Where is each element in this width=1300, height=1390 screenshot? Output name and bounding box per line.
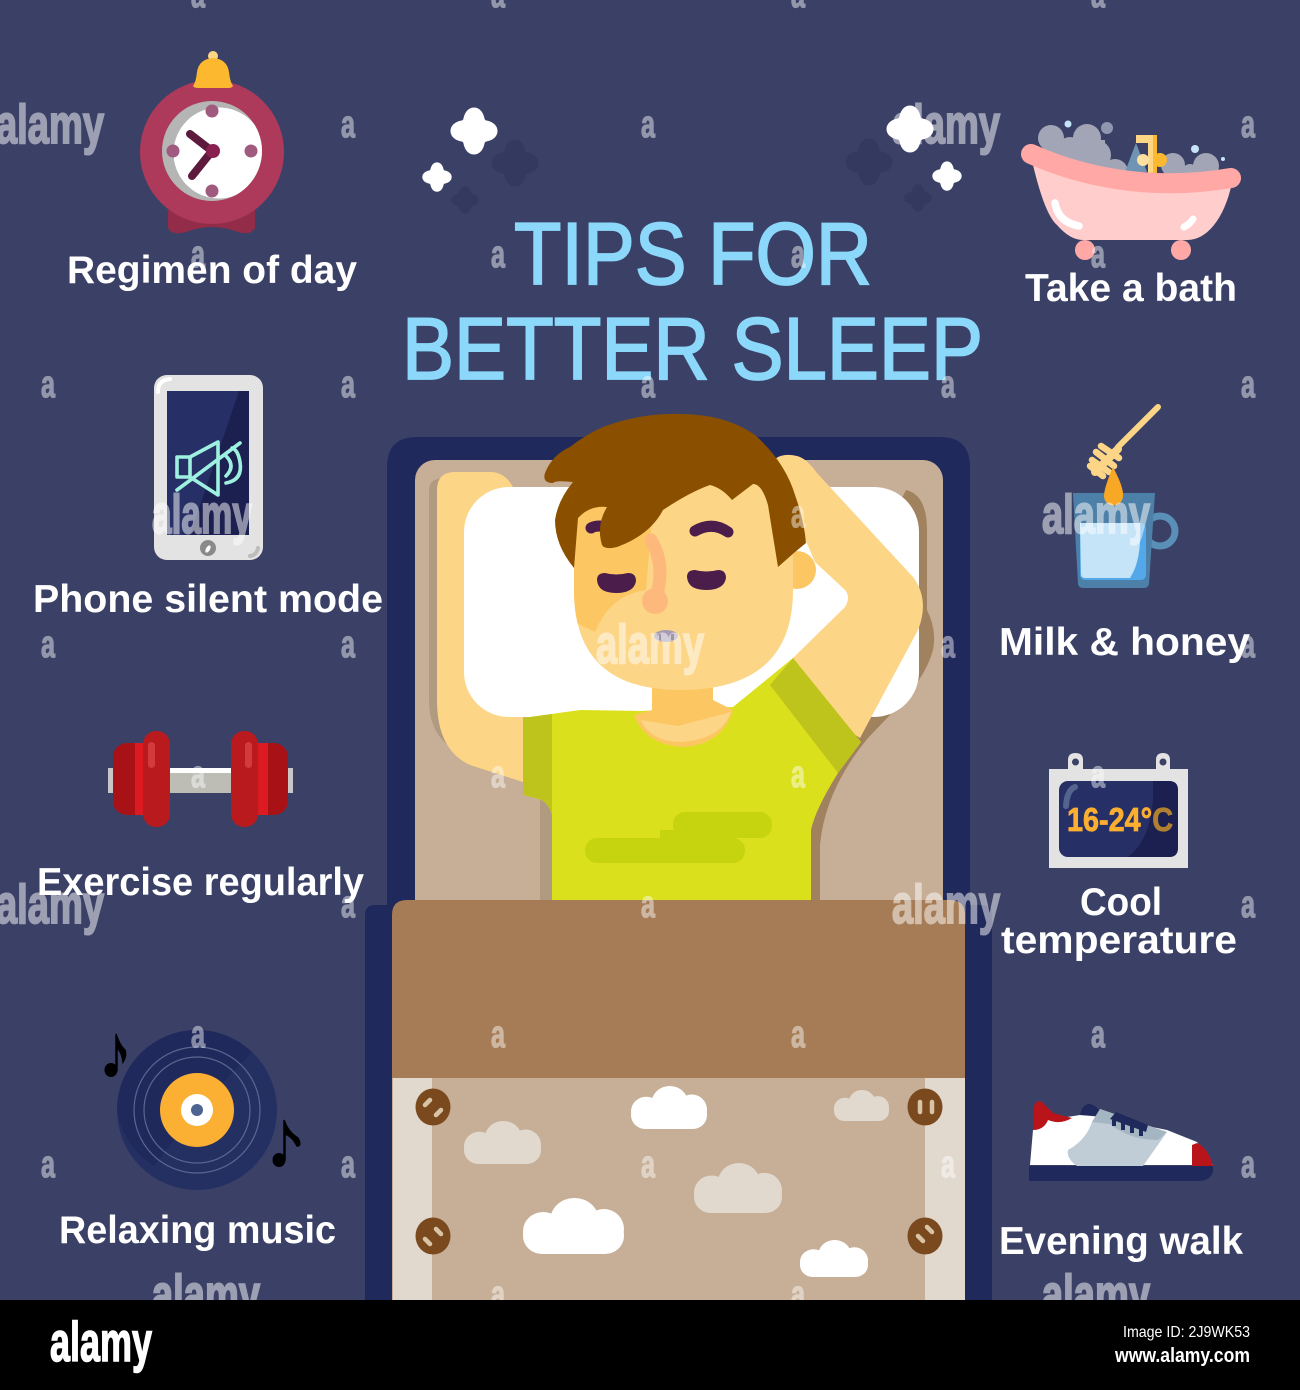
watermarks: a <box>791 234 806 276</box>
watermarks: a <box>641 104 656 146</box>
head <box>570 480 793 690</box>
label: take a bath: Take a bath <box>1025 267 1237 310</box>
watermarks: a <box>1091 754 1106 796</box>
icon: bathtub <box>1031 120 1232 260</box>
watermarks: a <box>1241 364 1256 406</box>
sheet <box>392 1078 965 1300</box>
watermarks: a <box>491 234 506 276</box>
label: regimen of day: Regimen of day <box>67 249 357 292</box>
nose <box>642 540 668 614</box>
watermarks: a <box>1091 1014 1106 1056</box>
blanket <box>392 900 965 1078</box>
watermarks: a <box>641 1144 656 1186</box>
watermarks: a <box>941 1144 956 1186</box>
icon: phone <box>154 375 263 560</box>
watermarks: a <box>491 494 506 536</box>
icon: sneaker <box>1029 1101 1213 1181</box>
eyebrows <box>591 526 728 532</box>
bed frame <box>365 437 992 1300</box>
watermarks: alamy <box>892 93 1000 155</box>
watermarks: a <box>191 754 206 796</box>
neck <box>634 680 733 747</box>
label: phone silent mode: Phone silent mode <box>33 578 383 621</box>
watermarks: a <box>191 234 206 276</box>
label: cool temperature: temperature <box>1001 919 1237 962</box>
icon: thermometer display: 16-24°C <box>1067 801 1173 838</box>
watermarks: a <box>41 364 56 406</box>
footer bar: Image ID: 2J9WK53 <box>1123 1324 1250 1341</box>
watermarks: a <box>341 1144 356 1186</box>
watermarks: a <box>1091 234 1106 276</box>
shirt <box>523 658 861 900</box>
title: BETTER SLEEP <box>402 299 983 398</box>
title: TIPS FOR <box>514 204 872 303</box>
watermarks: a <box>641 884 656 926</box>
footer bar <box>0 1300 1300 1390</box>
watermarks: a <box>41 624 56 666</box>
footer bar: www.alamy.com <box>1114 1345 1250 1367</box>
watermarks: alamy <box>152 483 252 545</box>
watermarks: alamy <box>1042 1263 1150 1325</box>
mouth <box>654 630 678 642</box>
left arm <box>437 472 523 782</box>
watermarks: a <box>191 1014 206 1056</box>
shadows under the sleeper <box>429 478 555 900</box>
label: milk and honey: Milk & honey <box>999 621 1250 664</box>
title <box>402 204 983 398</box>
watermarks: alamy <box>152 1263 260 1325</box>
watermarks: a <box>641 364 656 406</box>
watermarks: alamy <box>892 873 1000 935</box>
icon: thermometer display <box>1049 753 1188 868</box>
left music note <box>104 1034 126 1077</box>
clouds <box>464 1086 889 1277</box>
watermarks: a <box>791 754 806 796</box>
label: evening walk: Evening walk <box>999 1220 1243 1263</box>
decorative stars right <box>846 106 962 212</box>
decorative stars left <box>422 108 538 214</box>
mattress <box>415 460 943 920</box>
watermarks: a <box>1241 884 1256 926</box>
watermarks: a <box>791 494 806 536</box>
watermarks: a <box>341 104 356 146</box>
icon: vinyl record with music notes <box>104 1030 300 1190</box>
watermarks: a <box>1241 1144 1256 1186</box>
watermarks: a <box>1241 104 1256 146</box>
watermarks: a <box>491 1274 506 1316</box>
watermarks: alamy <box>596 613 704 675</box>
bed <box>365 414 992 1300</box>
watermarks: a <box>41 1144 56 1186</box>
closed eyes <box>597 570 726 593</box>
blanket buttons <box>416 1088 942 1254</box>
watermarks: a <box>491 754 506 796</box>
right arm behind head <box>772 455 923 738</box>
watermarks: a <box>341 884 356 926</box>
watermarks: a <box>791 1274 806 1316</box>
watermarks: a <box>341 364 356 406</box>
watermarks: alamy <box>0 93 104 155</box>
watermarks: a <box>1241 624 1256 666</box>
label: relaxing music: Relaxing music <box>59 1209 336 1252</box>
watermarks: a <box>791 1014 806 1056</box>
hair <box>544 414 806 568</box>
watermarks: a <box>941 364 956 406</box>
icon: dumbbell <box>108 731 293 827</box>
label: cool temperature <box>1001 881 1237 962</box>
pillow <box>464 487 919 717</box>
watermarks: a <box>941 624 956 666</box>
watermarks: alamy <box>1042 483 1150 545</box>
footer bar: alamy <box>50 1310 152 1373</box>
right music note <box>272 1120 300 1167</box>
watermarks: a <box>491 1014 506 1056</box>
label: cool temperature: Cool <box>1080 881 1162 924</box>
watermarks: alamy <box>0 873 104 935</box>
watermarks: a <box>341 624 356 666</box>
ear <box>778 551 816 589</box>
icon: milk and honey cup <box>1073 407 1175 588</box>
label: exercise regularly: Exercise regularly <box>37 861 364 904</box>
icon: alarm clock <box>140 51 284 233</box>
